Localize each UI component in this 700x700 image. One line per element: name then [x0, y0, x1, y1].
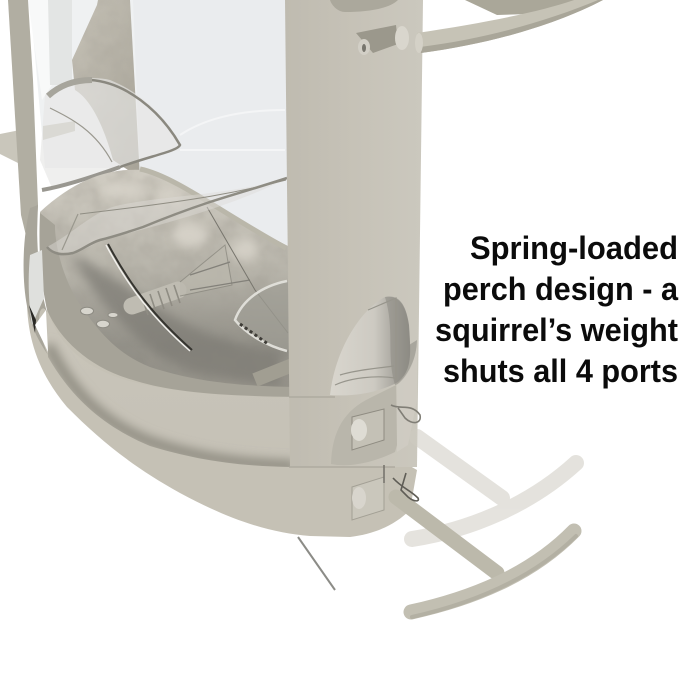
upper cotter pin	[391, 405, 420, 423]
outer lower band of base ring	[27, 300, 417, 537]
top mounting slot in column	[330, 0, 409, 55]
main feeder column	[285, 0, 423, 467]
tray back edge	[140, 169, 286, 248]
column seam lines	[289, 397, 395, 467]
callout text: perch design - a	[443, 271, 678, 307]
upper port window	[330, 297, 417, 395]
lower port recess	[352, 465, 384, 520]
lower right spring	[255, 364, 295, 380]
band shadow along lower edge	[48, 345, 295, 466]
left edge curved ring strap	[24, 205, 48, 355]
hanging thin rod	[298, 537, 335, 590]
wide middle band of base ring	[47, 300, 295, 467]
mounting rivets	[80, 307, 118, 328]
rear perch stub at left	[0, 121, 75, 170]
clear glass feeder tube	[28, 0, 290, 250]
front perch	[396, 497, 576, 617]
rear perch ghosted	[412, 437, 576, 539]
callout text: shuts all 4 ports	[443, 353, 678, 389]
callout text	[435, 230, 678, 389]
light mottled highlights	[103, 181, 259, 262]
tray rim	[39, 213, 296, 397]
callout text: squirrel’s weight	[435, 312, 678, 348]
lower clear funnel	[47, 178, 287, 254]
dark lower tray shadow	[72, 255, 280, 388]
seed tray interior	[39, 169, 298, 397]
diagonal spoke with highlight	[106, 244, 192, 351]
lower cotter pin	[393, 473, 418, 501]
central seed divider panel	[72, 0, 140, 178]
middle port window	[331, 340, 417, 465]
left vertical frame strip	[8, 0, 38, 260]
callout text: Spring-loaded	[470, 230, 678, 266]
top right perch	[415, 0, 603, 53]
inner grate	[235, 280, 298, 352]
spring	[132, 245, 250, 315]
upper clear seed port	[40, 78, 181, 190]
thin diagonal rod	[207, 207, 288, 333]
